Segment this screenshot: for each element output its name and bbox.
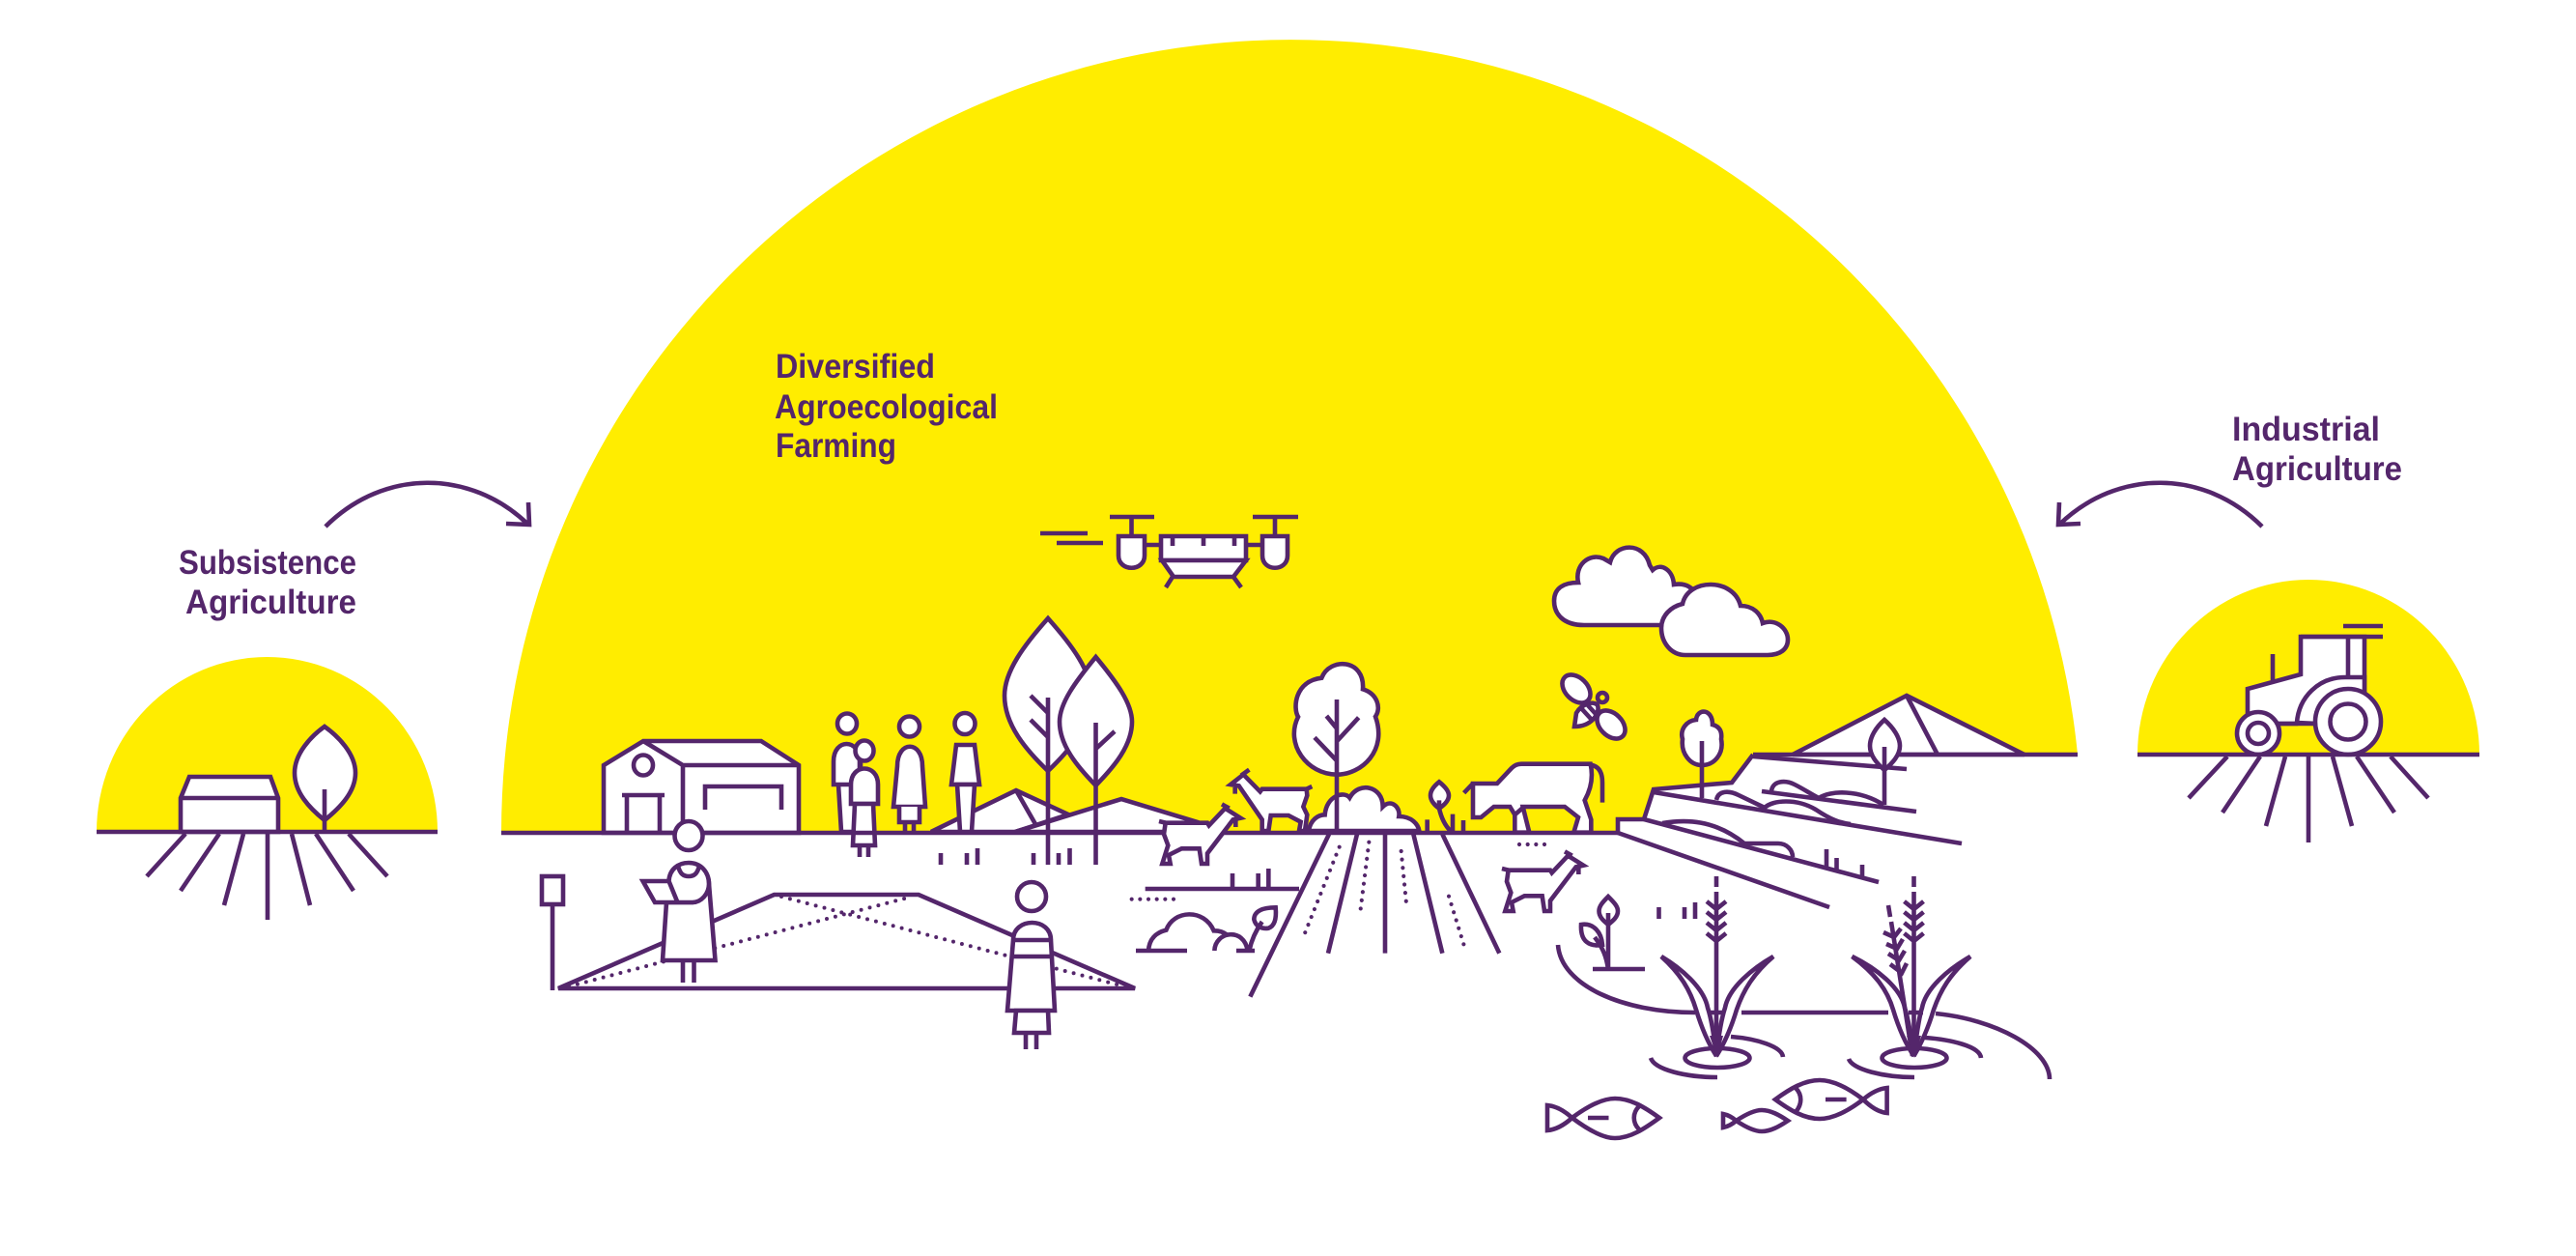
icon: small leaf plant with grass [1428, 782, 1463, 833]
hills behind the people [931, 790, 1203, 832]
grass tufts under trees [941, 848, 1070, 865]
dots under terrace edge [1132, 893, 1175, 905]
icon: fish left [1547, 1099, 1659, 1138]
yellow dome right [2137, 580, 2479, 755]
ground line centre [501, 831, 1618, 835]
icon: fish small [1723, 1110, 1788, 1131]
heading: industrial agriculture [2232, 411, 2402, 488]
grass tufts [1659, 902, 1695, 919]
icon: tractor [2237, 626, 2383, 755]
heading: diversified agroecological farming: Farming [776, 427, 896, 465]
icon: clouds [1554, 548, 1788, 655]
heading: subsistence agriculture: Agriculture [185, 584, 356, 621]
person: adult with trapezoid top [951, 713, 979, 832]
furrows left [147, 832, 387, 920]
panel: industrial agriculture dome [2137, 580, 2479, 842]
terraced hillside [1618, 696, 2078, 907]
pond with reeds, plants and fish [1547, 876, 2050, 1138]
icon: goat right [1502, 851, 1583, 911]
field trapezoid with dotted survey lines [558, 895, 1135, 988]
field furrows [1250, 834, 1499, 997]
icon: two leaf trees [1005, 618, 1132, 865]
farmland centre scene [1132, 664, 1602, 997]
heading: subsistence agriculture: Subsistence [179, 544, 356, 582]
mountain [1793, 696, 2024, 755]
panel: subsistence agriculture dome [97, 657, 438, 920]
icon: reed right [1853, 876, 1970, 1058]
icon: seedling with two leaves [1581, 897, 1645, 969]
heading: diversified agroecological farming [775, 348, 998, 465]
icon: drone [1040, 517, 1298, 587]
woman with tablet [643, 821, 715, 983]
round tree on terrace [1682, 712, 1722, 798]
yellow dome centre [501, 40, 2078, 833]
terrace outline [1618, 755, 1753, 833]
heading: industrial agriculture: Agriculture [2232, 450, 2402, 488]
icon: leaf tree [295, 727, 355, 832]
ripples and rings [1651, 1037, 1981, 1077]
group of people [834, 713, 979, 857]
heading: subsistence agriculture [179, 544, 356, 621]
panel: diversified agroecological farming [501, 40, 2078, 865]
terrace lines [1618, 756, 1962, 907]
yellow dome left [97, 657, 438, 832]
heading: diversified agroecological farming: Diversified [776, 348, 935, 385]
icon: goat upper [1231, 770, 1312, 831]
heading: industrial agriculture: Industrial [2232, 411, 2380, 448]
icon: bee [1557, 670, 1630, 744]
arrow: subsistence to diversified [326, 483, 529, 527]
heading: diversified agroecological farming: Agroecological [775, 388, 998, 426]
icon: field sensor post [542, 876, 563, 990]
ground line right [2137, 753, 2479, 756]
dots above right goat [1519, 839, 1546, 850]
icon: small bush and seedling [1136, 907, 1276, 951]
ground line left [97, 830, 438, 834]
pond outline [1558, 945, 2050, 1079]
icon: reed left [1661, 876, 1773, 1058]
person: woman in foreground [1007, 882, 1055, 1049]
terrace edge with grass [1146, 869, 1299, 889]
icon: fish right [1775, 1080, 1887, 1119]
field dotted rows [1304, 842, 1464, 946]
icon: barn [604, 741, 799, 833]
icon: round tree [1294, 664, 1378, 833]
icon: small barn [181, 777, 278, 832]
icon: cow [1464, 764, 1602, 833]
leaf tree on terrace [1870, 720, 1900, 805]
arrow: industrial to diversified [2058, 483, 2262, 527]
person: tall adult with child [834, 713, 878, 857]
crop mounds [1662, 782, 1883, 857]
icon: goat lower [1159, 804, 1240, 864]
person: woman in dress [893, 717, 925, 833]
furrows right [2189, 755, 2428, 842]
grass on terrace [1826, 849, 1862, 876]
icon: bush behind round tree [1309, 787, 1419, 831]
